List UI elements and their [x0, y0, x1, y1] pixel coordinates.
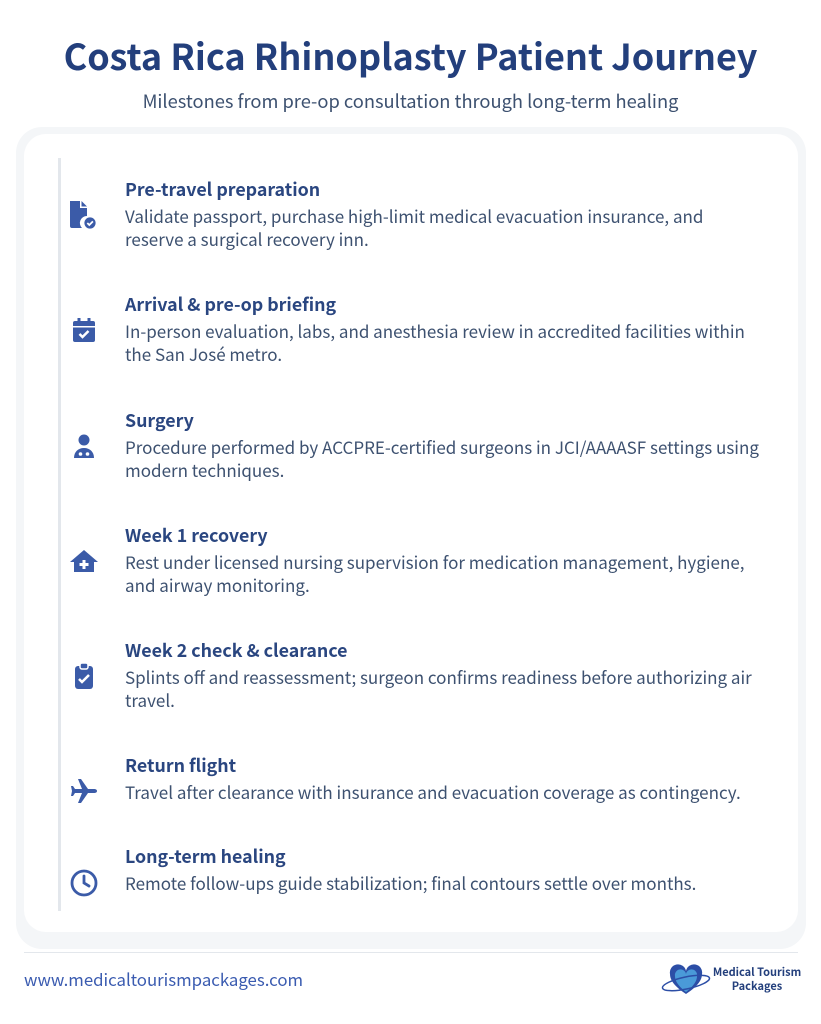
step: pre-travel preparation — [70, 176, 703, 251]
step: surgery — [74, 407, 759, 482]
step: arrival: In-person evaluation, labs, and anesthesia review in accredited facilities within the San José metro. — [125, 318, 745, 366]
icon: plane — [71, 779, 97, 803]
icon: house medical — [70, 550, 98, 572]
logo: Packages — [732, 978, 782, 994]
step: long-term: Long-term healing — [125, 843, 286, 869]
step: return flight: Return flight — [125, 752, 236, 778]
step: return flight: Travel after clearance with insurance and evacuation coverage as contingency. — [125, 779, 741, 804]
step: week 2: Week 2 check & clearance — [125, 637, 348, 663]
step: arrival: Arrival & pre-op briefing — [125, 291, 336, 317]
step: pre-travel preparation: Pre-travel preparation — [125, 176, 320, 202]
icon: calendar — [73, 318, 95, 342]
step: long-term — [70, 843, 696, 896]
title: Costa Rica Rhinoplasty Patient Journey — [64, 29, 757, 81]
step: long-term: Remote follow-ups guide stabilization; final contours settle over months. — [125, 870, 696, 895]
icon: clock — [70, 870, 98, 896]
step: week 2: Splints off and reassessment; surgeon confirms readiness before authorizing air travel. — [125, 664, 752, 712]
step: week 1 — [70, 522, 744, 597]
step: surgery: Surgery — [125, 407, 194, 433]
footer url: www.medicaltourismpackages.com — [24, 967, 303, 991]
step: week 1: Rest under licensed nursing supervision for medication management, hygiene, and airway monitoring. — [125, 549, 744, 597]
step: arrival — [73, 291, 745, 366]
step: return flight — [71, 752, 741, 804]
subtitle: Milestones from pre-op consultation through long-term healing — [143, 88, 678, 114]
step: week 2 — [75, 637, 752, 712]
logo — [662, 964, 801, 994]
icon: doctor — [74, 434, 94, 458]
icon: document check — [70, 201, 96, 229]
panel: timeline card — [16, 127, 806, 949]
icon: clipboard check — [75, 664, 93, 689]
logo: Medical Tourism — [713, 964, 801, 980]
step: pre-travel preparation: Validate passport, purchase high-limit medical evacuation insurance, and reserve a surgical recovery inn. — [125, 203, 703, 251]
step: week 1: Week 1 recovery — [125, 522, 268, 548]
step: surgery: Procedure performed by ACCPRE-certified surgeons in JCI/AAAASF settings using modern techniques. — [125, 434, 759, 482]
